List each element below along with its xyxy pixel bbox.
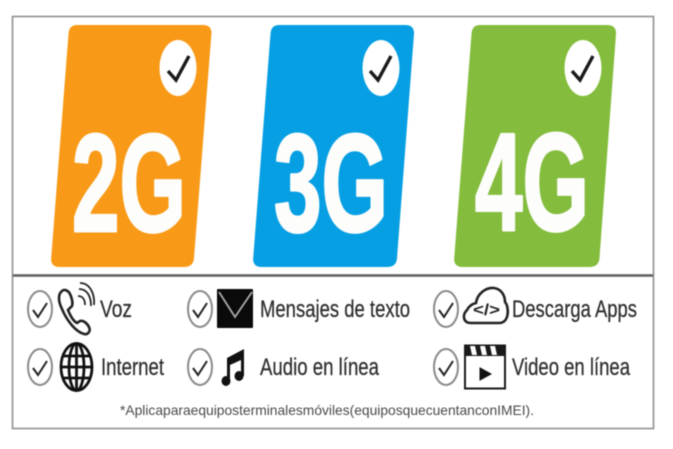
label: Mensajes de texto: Mensajes de texto [260, 296, 410, 323]
icon: cloud code: </> [473, 302, 500, 319]
icon: 2G check badge [160, 40, 196, 96]
icon: check [434, 291, 458, 327]
icon: check [188, 291, 212, 327]
label: Internet: Internet [101, 354, 164, 381]
feature: Mensajes de texto [188, 289, 410, 328]
icon: cloud code [464, 288, 508, 323]
label: Video en linea: Video en línea [512, 354, 630, 381]
icon: check [28, 349, 52, 385]
icon: music note [222, 349, 244, 386]
label: Audio en linea: Audio en línea [260, 354, 379, 381]
icon: check [28, 291, 52, 327]
icon: globe [61, 344, 92, 390]
icon: envelope [217, 289, 253, 328]
label: Descarga Apps: Descarga Apps [512, 296, 637, 323]
panel: 3G card [253, 25, 414, 267]
icon: check [434, 349, 458, 385]
label: Voz: Voz [100, 296, 132, 323]
feature: Audio en linea [188, 349, 379, 386]
feature: Voz [28, 283, 132, 334]
icon: phone [59, 283, 94, 334]
icon: check [188, 349, 212, 385]
heading: 3G: 3G [274, 106, 388, 261]
icon: clapperboard [465, 345, 505, 388]
feature: Internet [28, 344, 164, 390]
panel: 4G card [454, 25, 616, 267]
icon: 3G check badge [362, 40, 400, 96]
footnote: *Aplicaparaequiposterminalesmóviles(equiposquecuentanconIMEI). [120, 402, 534, 418]
icon: 4G check badge [564, 40, 602, 96]
feature: Video en linea [434, 345, 630, 388]
feature: Descarga Apps [434, 288, 637, 327]
heading: 4G: 4G [475, 105, 589, 260]
heading: 2G: 2G [72, 106, 186, 261]
panel: 2G card [51, 25, 211, 267]
